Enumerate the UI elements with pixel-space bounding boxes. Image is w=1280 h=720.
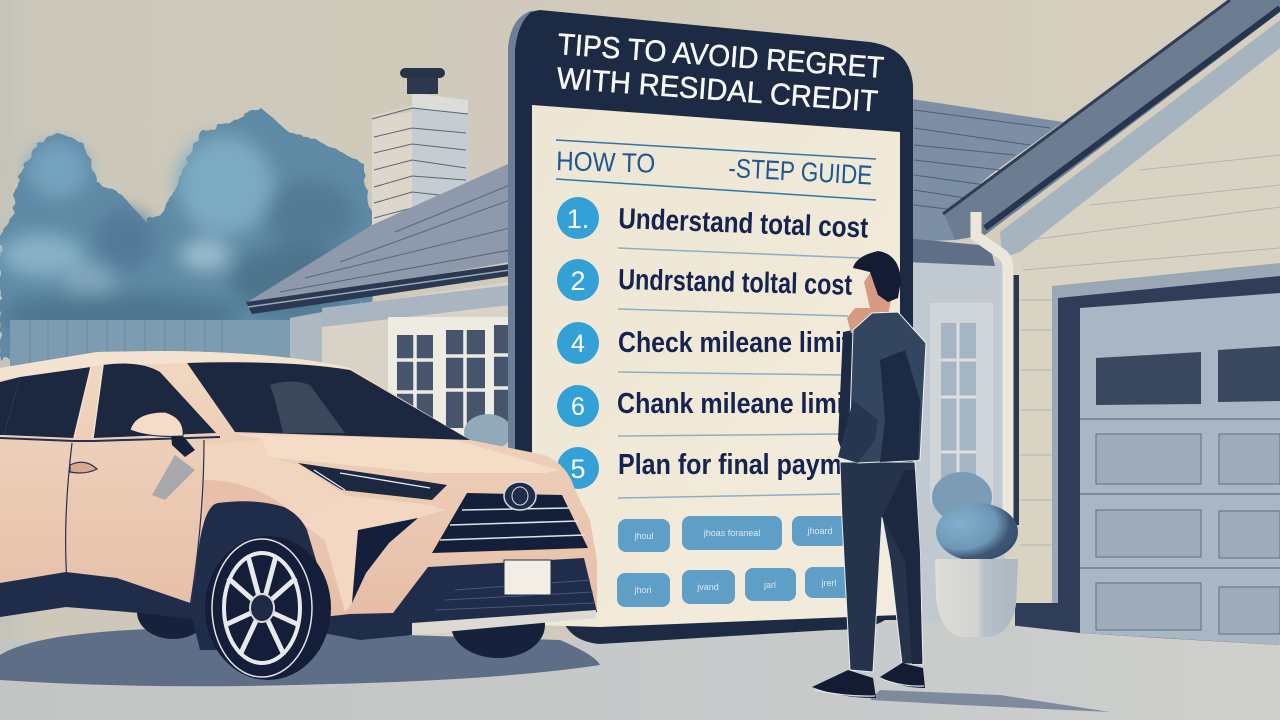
step 5	[557, 447, 842, 489]
neck and hand	[847, 270, 892, 333]
front fender highlight	[204, 440, 345, 522]
guide heading	[556, 140, 876, 200]
step 2: 2	[570, 266, 586, 296]
buttons row 2: jarl	[763, 580, 776, 590]
buttons row 2	[617, 567, 855, 607]
window right	[930, 303, 993, 503]
car	[0, 351, 597, 680]
hair	[853, 251, 901, 302]
chimney	[372, 68, 468, 240]
buttons row 2: jhori	[633, 585, 652, 595]
lower rocker	[0, 572, 198, 620]
planter with shrub	[932, 472, 1018, 637]
sign title: TIPS TO AVOID REGRET	[556, 28, 885, 85]
guide heading: -STEP GUIDE	[728, 153, 873, 191]
step dividers	[618, 248, 860, 498]
buttons row 1	[618, 516, 848, 552]
window left	[388, 317, 510, 442]
far arm	[838, 330, 853, 460]
side mirror	[130, 412, 195, 457]
grille	[432, 482, 588, 553]
buttons row 2: jvand	[696, 582, 719, 592]
house	[246, 68, 1063, 640]
step 4	[557, 385, 852, 427]
hood	[235, 434, 560, 473]
sign frame	[508, 10, 913, 644]
buttons row 2: jrerl	[820, 578, 836, 588]
ground	[0, 622, 1280, 720]
step 3: 4	[571, 330, 585, 358]
sign title: WITH RESIDAL CREDIT	[555, 62, 879, 119]
step 2: Undrstand toltal cost	[618, 264, 853, 302]
buttons row 1: jhoard	[806, 526, 833, 536]
step 5: Plan for final paym	[618, 449, 842, 481]
sign board	[508, 10, 913, 644]
guide heading: HOW TO	[556, 146, 656, 179]
step 2	[557, 259, 853, 302]
step 3	[557, 322, 850, 364]
jacket	[838, 312, 926, 463]
garage wall	[1005, 45, 1280, 640]
garage roof	[943, 0, 1280, 240]
roof highlight	[0, 351, 352, 380]
rear right roof	[905, 98, 1063, 242]
fog intake	[352, 518, 418, 603]
car shadow	[0, 628, 600, 686]
garage	[943, 0, 1280, 645]
small shrub behind car	[464, 414, 512, 450]
step 4: Chank mileane limit	[617, 388, 852, 420]
sign title	[555, 28, 885, 119]
badge	[504, 482, 536, 510]
step 1	[557, 197, 869, 245]
person shadow	[870, 690, 1110, 712]
step 1: Understand total cost	[618, 203, 869, 245]
buttons row 1: jhoas foraneal	[703, 528, 760, 538]
house wall	[322, 280, 520, 640]
lower bumper	[323, 558, 597, 640]
step 4: 6	[571, 393, 585, 421]
number plate	[504, 560, 551, 595]
door seam and handle	[66, 440, 204, 607]
fence	[10, 320, 290, 370]
wheel arch	[190, 501, 330, 650]
main roof	[246, 163, 510, 305]
shoes	[812, 663, 925, 698]
front wheel	[205, 536, 331, 680]
step 3: Check mileane limit	[618, 327, 850, 359]
garage door	[1015, 263, 1280, 645]
headlight	[298, 463, 447, 500]
sign panel	[532, 105, 900, 627]
windows	[0, 362, 470, 441]
person	[812, 251, 1110, 712]
rear and front tyres behind body	[137, 585, 209, 639]
downspout	[976, 212, 1016, 525]
car body	[0, 351, 597, 625]
legs	[840, 462, 923, 672]
buttons row 1: jhoul	[633, 531, 654, 541]
mirror shadow	[152, 455, 195, 500]
step 5: 5	[570, 454, 586, 484]
trees	[0, 107, 373, 360]
step 1: 1.	[567, 204, 589, 234]
